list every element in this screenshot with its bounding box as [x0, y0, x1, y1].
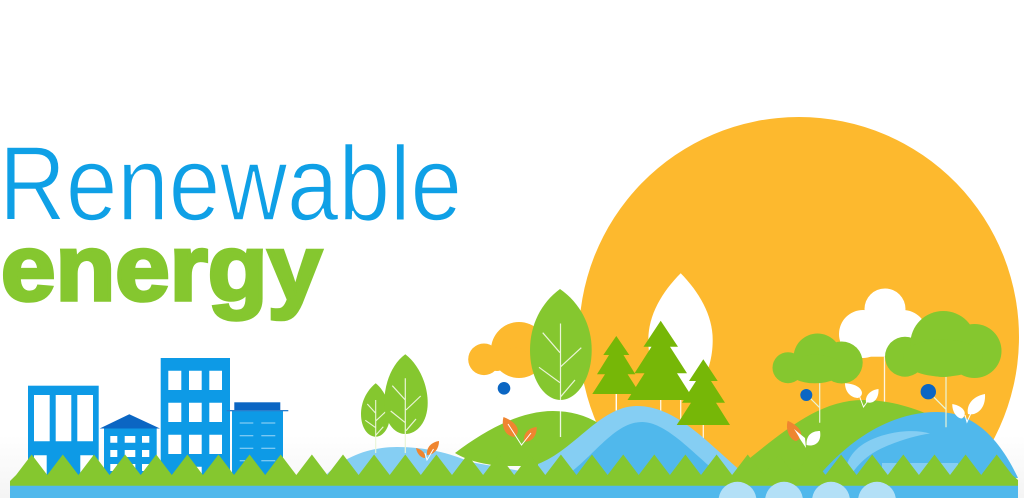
hill: green right — [745, 400, 925, 478]
white trunk pine 1 — [615, 394, 617, 410]
icon: orange cloud — [468, 322, 547, 378]
title: Renewable: Renewable — [0, 125, 462, 243]
sprout: white right — [952, 394, 985, 422]
trunk of big leaf tree on hill — [560, 396, 562, 437]
bubbles in water — [719, 482, 896, 498]
icon: white leaf in the sun — [648, 273, 713, 397]
pine tree 1 — [592, 336, 640, 394]
sprout: white top — [845, 383, 879, 407]
title: energy: energy — [1, 215, 322, 320]
sprout: orange left — [416, 441, 439, 460]
building 3 tall — [161, 358, 230, 476]
sprout: orange and white on right hill — [787, 421, 820, 448]
leaf tree left small — [361, 383, 390, 453]
building 1 — [28, 386, 99, 476]
city buildings — [28, 358, 288, 476]
river highlight — [847, 431, 930, 472]
icon: blue dot tree 1 — [800, 389, 812, 401]
hill: light blue left — [325, 447, 560, 478]
leaf tree large — [530, 289, 592, 400]
sprout: orange centre — [503, 417, 537, 445]
icon: white cloud — [839, 288, 927, 358]
pine tree 2 — [628, 321, 694, 400]
icon: blue dot left — [498, 382, 510, 395]
round tree 2 — [885, 311, 1002, 427]
hill: blue right — [822, 412, 1018, 478]
leaf tree left large — [384, 354, 428, 453]
icon: blue dot tree 2 — [921, 384, 936, 399]
ground: water strip — [10, 486, 1018, 498]
tree trunks behind hills — [616, 357, 884, 445]
round tree 1 — [772, 334, 863, 423]
pine tree 3 — [677, 359, 730, 425]
building 4 with cap — [227, 402, 288, 476]
ground: triangle grass — [10, 454, 1018, 486]
building 2 with roof — [100, 414, 160, 476]
hill: blue layered centre — [538, 406, 742, 476]
sun — [579, 117, 1019, 498]
hill: green centre — [455, 411, 640, 466]
